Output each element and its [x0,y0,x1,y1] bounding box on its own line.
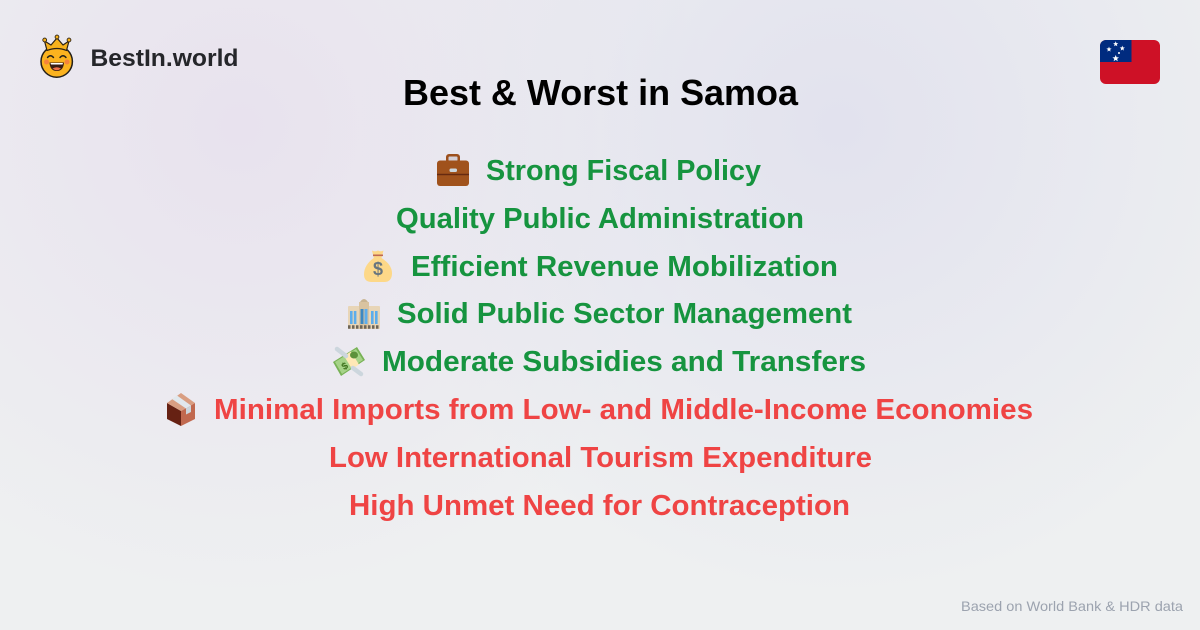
icon: money with wings [333,347,365,376]
icon: crowned smiley [41,35,72,77]
logo: BestIn.world [41,35,238,77]
item: Low International Tourism Expenditure: Low International Tourism Expenditure [329,442,872,474]
title: Best & Worst in Samoa [403,72,799,113]
list: best and worst items [167,154,1033,522]
item: Minimal Imports from Low- and Middle-Income Economies: Minimal Imports from Low- and Middle-Income Economies [214,394,1033,426]
item: High Unmet Need for Contraception: High Unmet Need for Contraception [349,490,850,522]
icon: Samoa flag [1100,40,1160,84]
logo wordmark: BestIn.world [90,45,238,72]
item: Solid Public Sector Management: Solid Public Sector Management [397,298,852,330]
icon: money bag [364,250,392,282]
item: Moderate Subsidies and Transfers: Moderate Subsidies and Transfers [382,346,866,378]
item: Quality Public Administration: Quality Public Administration [396,203,804,235]
icon: money with wings: $ [340,360,351,373]
icon: money bag: $ [373,259,383,279]
item: Strong Fiscal Policy: Strong Fiscal Policy [486,155,761,187]
icon: package [167,393,195,426]
icon: briefcase [437,154,469,186]
icon: office building [348,299,380,329]
item: Efficient Revenue Mobilization: Efficient Revenue Mobilization [411,251,838,283]
footer: data source: Based on World Bank & HDR data [961,598,1183,614]
